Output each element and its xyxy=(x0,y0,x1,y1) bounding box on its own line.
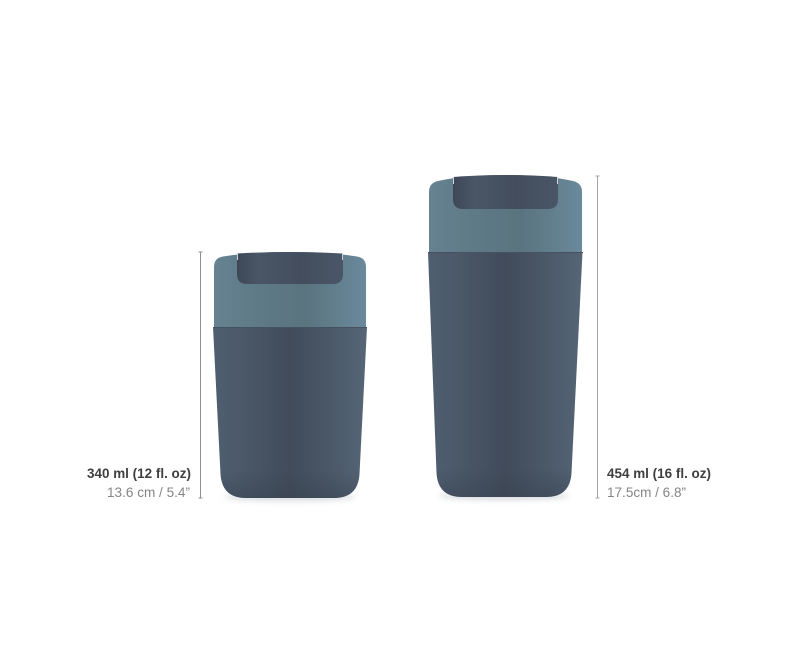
height line: small cup xyxy=(198,252,202,498)
flap: large xyxy=(453,175,558,209)
label: small cup: 13.6 cm / 5.4” xyxy=(107,485,190,500)
foot shading: small xyxy=(220,470,360,498)
lid band: large xyxy=(429,175,582,253)
shadow: small cup xyxy=(224,493,356,501)
height line: large cup xyxy=(596,176,600,498)
label: small cup: 340 ml (12 fl. oz) xyxy=(87,466,191,481)
label: large cup: 454 ml (16 fl. oz) xyxy=(607,466,711,481)
cup body: large xyxy=(428,252,582,497)
seam: small xyxy=(213,327,367,328)
flap highlights: large xyxy=(454,177,558,184)
seam: large xyxy=(428,252,583,253)
foot shading: large xyxy=(436,468,572,497)
label: small cup xyxy=(87,466,191,500)
large cup xyxy=(428,175,583,500)
label: large cup xyxy=(607,466,711,500)
flap highlights: small xyxy=(238,253,342,260)
flap: small xyxy=(237,252,343,284)
cup body: small xyxy=(213,327,367,498)
label: large cup: 17.5cm / 6.8” xyxy=(607,485,686,500)
lid band: small xyxy=(214,252,366,328)
small cup xyxy=(213,252,367,501)
shadow: large cup xyxy=(438,492,570,500)
